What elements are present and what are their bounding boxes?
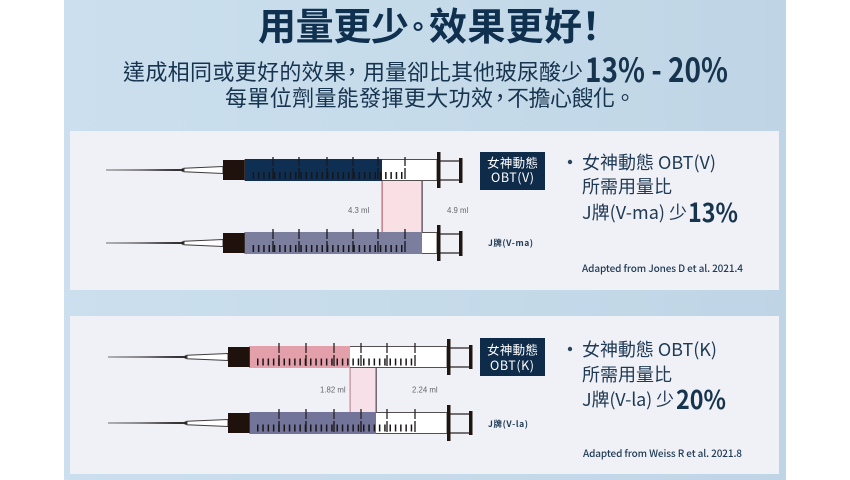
label: 1.82 ml: 1.82 ml — [320, 386, 346, 394]
text block: 13% comparison: 13% — [688, 193, 738, 230]
label: 4.3 ml: 4.3 ml — [348, 206, 369, 215]
product box: OBT(V): 女神動態 — [487, 152, 538, 172]
subtitle line 1 — [123, 44, 728, 92]
text block: 13% comparison: 所需用量比 — [582, 173, 672, 199]
subtitle line 2 — [225, 81, 636, 113]
source note: Adapted from Jones D et al. 2021.4 — [582, 260, 743, 275]
subtitle line 2: 。 — [614, 81, 636, 113]
product box: OBT(K) — [480, 338, 545, 376]
subtitle line 1: 達成相同或更好的效果 — [123, 55, 346, 87]
syringe: J brand V-la — [108, 405, 472, 441]
subtitle line 2: 每單位劑量能發揮更大功效 — [225, 81, 493, 113]
chart band: dose difference — [382, 181, 423, 232]
subtitle line 1: 用量卻比其他玻尿酸少 — [363, 55, 583, 87]
panel: OBT(K) comparison — [70, 316, 779, 474]
subtitle line 1: 13% - 20% — [585, 44, 728, 92]
title: 。 — [404, 6, 432, 46]
product box: OBT(V): OBT(V) — [491, 167, 534, 186]
text block: 13% comparison: J牌(V-ma) 少 — [582, 199, 687, 225]
chart band: dose difference — [350, 368, 377, 412]
text block: 13% comparison — [568, 149, 738, 230]
text block: 20% comparison: 所需用量比 — [582, 361, 672, 387]
subtitle line 2: 不擔心餿化 — [507, 81, 615, 113]
label: J brand V-ma: J牌(V-ma) — [488, 237, 533, 249]
subtitle line 1: ， — [341, 55, 363, 87]
syringe: OBT(K) — [108, 339, 472, 375]
product box: OBT(K): OBT(K) — [490, 355, 534, 374]
text block: 13% comparison: 女神動態 OBT(V) — [582, 149, 716, 175]
title — [258, 0, 610, 51]
text block: 20% comparison — [568, 336, 726, 417]
text block: 20% comparison: 女神動態 OBT(K) — [582, 336, 717, 362]
source note: Adapted from Weiss R et al. 2021.8 — [583, 445, 742, 460]
product box: OBT(V) — [480, 152, 545, 190]
text block: 20% comparison: 20% — [676, 380, 726, 417]
label: J brand V-la: J牌(V-la) — [488, 418, 528, 430]
syringe: J brand V-ma — [106, 225, 462, 261]
subtitle line 2: ， — [489, 81, 511, 113]
label: 2.24 ml: 2.24 ml — [412, 386, 438, 394]
label: 4.9 ml: 4.9 ml — [447, 206, 468, 215]
syringe: OBT(V) — [106, 152, 462, 188]
panel: OBT(V) comparison — [70, 131, 779, 290]
text block: 20% comparison: J牌(V-la) 少 — [582, 386, 674, 412]
product box: OBT(K): 女神動態 — [487, 340, 538, 358]
